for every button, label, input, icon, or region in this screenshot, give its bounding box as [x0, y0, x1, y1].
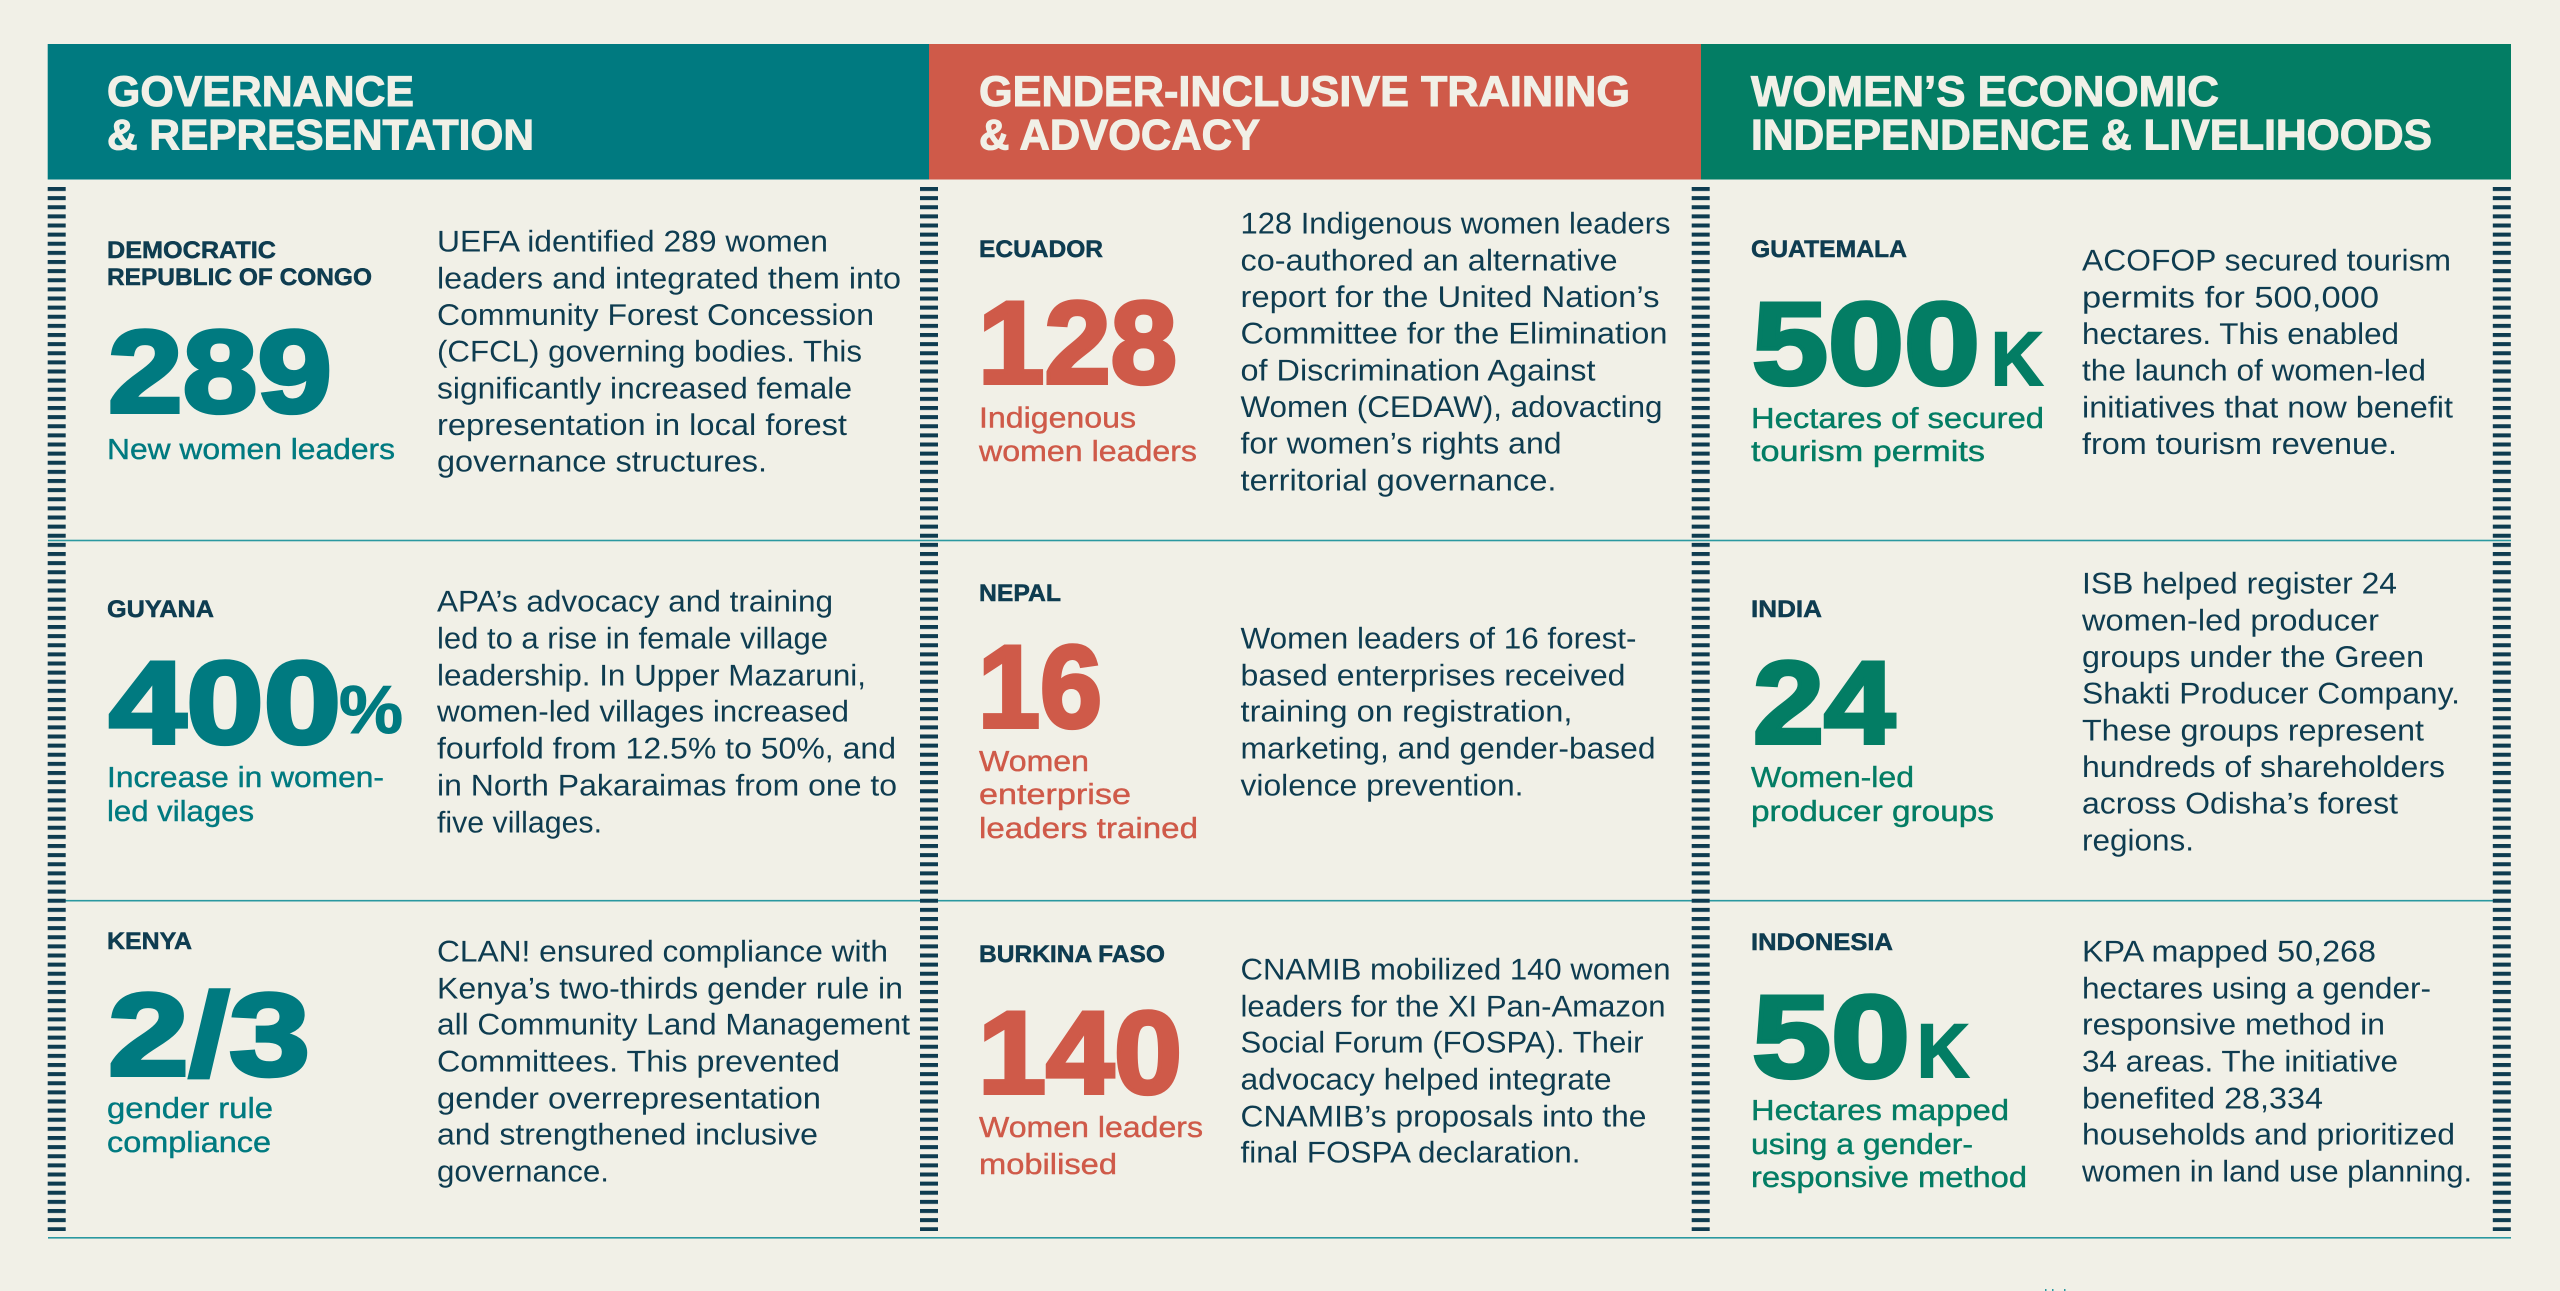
stat label: Women leaders — [979, 1112, 1203, 1144]
stat: 16: 16 — [978, 621, 1102, 752]
stat label: Indigenous — [979, 402, 1136, 434]
heading: governance and representation — [107, 68, 534, 160]
description: governance structures. — [437, 446, 767, 479]
heading: gender-inclusive training and advocacy: GENDER-INCLUSIVE TRAINING — [979, 68, 1630, 116]
stat: 289: 289 — [108, 306, 332, 437]
stat label: tourism permits — [1751, 436, 1985, 468]
description — [1240, 208, 1670, 498]
stat: 140: 140 — [978, 987, 1182, 1118]
heading: gender-inclusive training and advocacy — [979, 68, 1630, 160]
stat: 400% — [109, 637, 403, 768]
description: APA’s advocacy and training — [437, 586, 833, 619]
panel: governance header — [48, 44, 929, 180]
description: leadership. In Upper Mazaruni, — [437, 660, 866, 693]
description: for women’s rights and — [1240, 428, 1562, 461]
panel: gender-inclusive header — [929, 44, 1701, 180]
description: co-authored an alternative — [1240, 245, 1618, 278]
description — [437, 226, 901, 479]
stat label: gender rule — [107, 1093, 273, 1125]
stat: 400%: % — [339, 672, 403, 748]
stat label: Increase in women- — [107, 762, 384, 794]
stat: 50K — [1752, 971, 1969, 1102]
panel: India — [1751, 568, 2460, 858]
description: women in land use planning. — [2081, 1156, 2472, 1189]
country label: REPUBLIC OF CONGO — [107, 264, 372, 291]
description: the launch of women-led — [2082, 355, 2426, 388]
description: leaders and integrated them into — [437, 263, 901, 296]
stat label: Hectares mapped — [1751, 1095, 2009, 1127]
stat label — [979, 746, 1198, 845]
description: violence prevention. — [1240, 770, 1524, 803]
panel: Guatemala — [1751, 236, 2454, 468]
stat label: enterprise — [979, 779, 1131, 811]
description: Shakti Producer Company. — [2082, 678, 2460, 711]
description: and strengthened inclusive — [437, 1119, 818, 1152]
stat label: Women — [979, 746, 1089, 778]
description: households and prioritized — [2082, 1119, 2455, 1152]
description: ISB helped register 24 — [2082, 568, 2397, 601]
description: These groups represent — [2082, 715, 2425, 748]
country label — [107, 237, 372, 291]
description: report for the United Nation’s — [1240, 281, 1660, 314]
country label: KENYA — [107, 928, 192, 955]
stat label: women leaders — [978, 436, 1197, 468]
description: marketing, and gender-based — [1240, 733, 1656, 766]
description: led to a rise in female village — [437, 623, 828, 656]
description — [2081, 936, 2472, 1189]
description: regions. — [2082, 825, 2194, 858]
description: all Community Land Management — [437, 1009, 911, 1042]
description: CLAN! ensured compliance with — [437, 936, 888, 969]
description: representation in local forest — [437, 409, 848, 442]
description: Committees. This prevented — [437, 1046, 840, 1079]
stat: 50K: K — [1917, 1009, 1969, 1094]
country label: NEPAL — [979, 580, 1061, 607]
description: 128 Indigenous women leaders — [1240, 208, 1670, 241]
stat label: New women leaders — [107, 434, 395, 466]
heading: women's economic independence and livelihoods: WOMEN’S ECONOMIC — [1751, 68, 2219, 116]
description: responsive method in — [2082, 1009, 2385, 1042]
stat: 500K — [1752, 278, 2043, 409]
stat: 500K: K — [1991, 317, 2043, 402]
stat label — [107, 1093, 273, 1159]
panel: Ecuador — [978, 208, 1670, 498]
panel: Guyana — [107, 586, 897, 840]
country label: ECUADOR — [979, 236, 1103, 263]
stat label: leaders trained — [979, 813, 1198, 845]
description: leaders for the XI Pan-Amazon — [1240, 991, 1666, 1024]
description: from tourism revenue. — [2082, 428, 2397, 461]
heading: women's economic independence and livelihoods — [1751, 68, 2432, 160]
description: Community Forest Concession — [437, 299, 874, 332]
stat label — [978, 402, 1197, 468]
stat label: responsive method — [1751, 1162, 2027, 1194]
description: significantly increased female — [437, 373, 852, 406]
country label: INDONESIA — [1751, 929, 1893, 956]
description: UEFA identified 289 women — [437, 226, 828, 259]
country label: BURKINA FASO — [979, 941, 1165, 968]
description: hundreds of shareholders — [2082, 751, 2445, 784]
stat label — [1751, 1095, 2027, 1194]
description: hectares. This enabled — [2082, 318, 2399, 351]
description: training on registration, — [1240, 696, 1572, 729]
panel: Indonesia — [1751, 929, 2472, 1194]
stat label: compliance — [107, 1127, 271, 1159]
stat: 400%: 400 — [109, 637, 341, 768]
panel: Kenya — [107, 928, 911, 1189]
stat label: Hectares of secured — [1751, 403, 2044, 435]
stat label: using a gender- — [1751, 1129, 1973, 1161]
heading: governance and representation: GOVERNANCE — [107, 68, 414, 116]
stat: 50K: 50 — [1752, 971, 1910, 1102]
stat: 128: 128 — [978, 277, 1177, 408]
description: KPA mapped 50,268 — [2082, 936, 2376, 969]
description: initiatives that now benefit — [2082, 392, 2454, 425]
description: Social Forum (FOSPA). Their — [1240, 1027, 1644, 1060]
heading: gender-inclusive training and advocacy: & ADVOCACY — [979, 112, 1260, 160]
panel: economic independence header — [1701, 44, 2511, 180]
country label: GUYANA — [107, 596, 214, 623]
description: 34 areas. The initiative — [2082, 1046, 2398, 1079]
stat label — [1751, 762, 1994, 828]
description: Committee for the Elimination — [1240, 318, 1668, 351]
description: permits for 500,000 — [2082, 281, 2379, 314]
stat label: Women-led — [1751, 762, 1914, 794]
description: (CFCL) governing bodies. This — [437, 336, 862, 369]
description: advocacy helped integrate — [1240, 1064, 1612, 1097]
stat label: led vilages — [107, 796, 254, 828]
panel: Democratic Republic of Congo — [107, 226, 901, 479]
description: territorial governance. — [1240, 465, 1556, 498]
description: CNAMIB mobilized 140 women — [1240, 954, 1670, 987]
description: groups under the Green — [2082, 641, 2424, 674]
description — [2082, 245, 2454, 461]
stat label — [979, 1112, 1203, 1181]
description: women-led producer — [2081, 605, 2379, 638]
description: governance. — [437, 1156, 609, 1189]
description: final FOSPA declaration. — [1240, 1137, 1580, 1170]
description: Women (CEDAW), adovacting — [1240, 391, 1662, 424]
country label: GUATEMALA — [1751, 236, 1907, 263]
description — [1240, 954, 1670, 1170]
stat: 24: 24 — [1753, 637, 1895, 768]
description: five villages. — [437, 807, 602, 840]
stat: 2/3: 2/3 — [108, 969, 310, 1100]
description: of Discrimination Against — [1240, 355, 1596, 388]
panel: Nepal — [978, 580, 1656, 845]
description: Kenya’s two-thirds gender rule in — [437, 973, 903, 1006]
description: in North Pakaraimas from one to — [437, 770, 897, 803]
description — [437, 936, 911, 1189]
description: fourfold from 12.5% to 50%, and — [437, 733, 896, 766]
stat: 500K: 500 — [1752, 278, 1980, 409]
description: hectares using a gender- — [2082, 973, 2431, 1006]
stat label — [1751, 403, 2044, 468]
description — [2081, 568, 2460, 858]
description: CNAMIB’s proposals into the — [1240, 1101, 1646, 1134]
description: across Odisha’s forest — [2082, 788, 2399, 821]
panel: Burkina Faso — [978, 941, 1670, 1181]
stat label — [107, 762, 384, 828]
description: based enterprises received — [1240, 660, 1626, 693]
description: women-led villages increased — [436, 696, 849, 729]
stat label: mobilised — [979, 1149, 1117, 1181]
description: gender overrepresentation — [437, 1083, 821, 1116]
description — [436, 586, 897, 840]
description: ACOFOP secured tourism — [2082, 245, 2451, 278]
country label: DEMOCRATIC — [107, 237, 276, 264]
heading: governance and representation: & REPRESENTATION — [107, 112, 534, 160]
stat label: producer groups — [1751, 796, 1994, 828]
description — [1240, 623, 1656, 803]
description: benefited 28,334 — [2082, 1083, 2323, 1116]
heading: women's economic independence and livelihoods: INDEPENDENCE & LIVELIHOODS — [1751, 112, 2432, 160]
country label: INDIA — [1751, 596, 1822, 623]
description: Women leaders of 16 forest- — [1240, 623, 1636, 656]
